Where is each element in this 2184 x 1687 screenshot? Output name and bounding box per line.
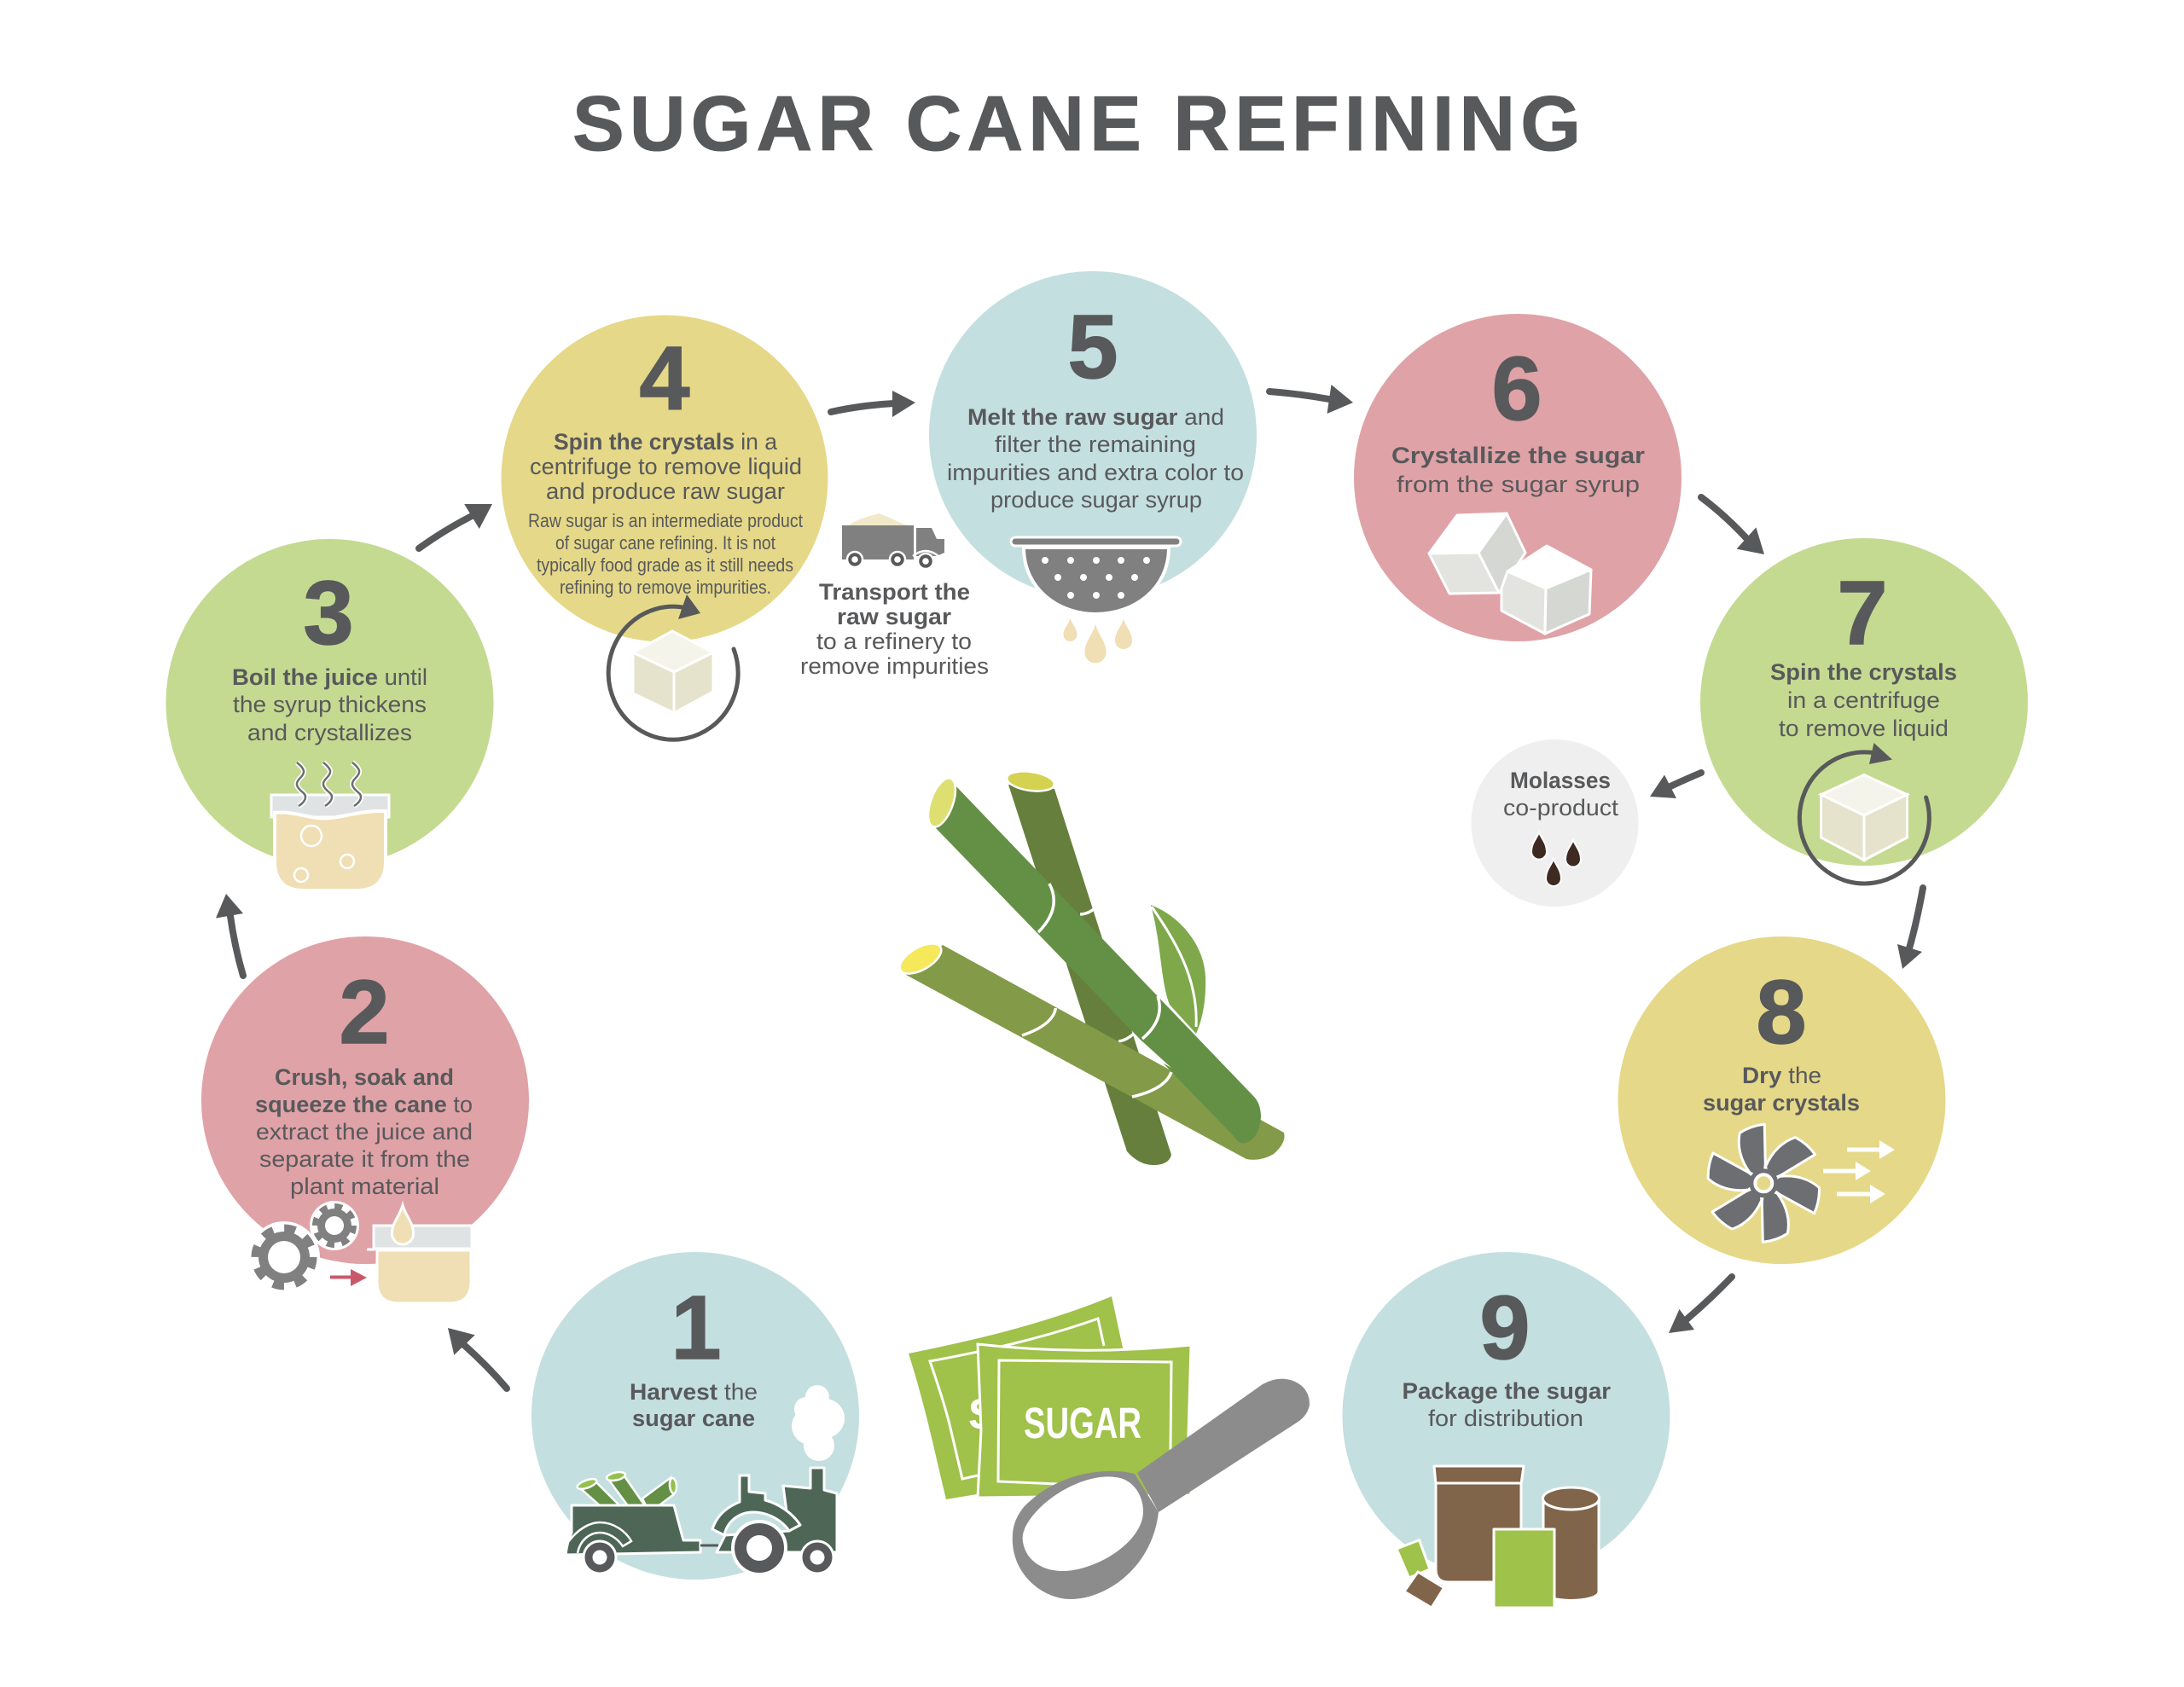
panel: step 7 spin: [1700, 538, 2028, 884]
front packet: [978, 1344, 1191, 1498]
text: step 1: [630, 1379, 758, 1431]
wagon fender arcs: [568, 1522, 631, 1553]
text: step 5: impurities and extra color to: [947, 460, 1244, 485]
icon: centrifuge cube: [1799, 743, 1929, 884]
icon: sugar cubes: [1429, 513, 1591, 634]
text: step 2: Crush, soak and: [275, 1064, 454, 1090]
icon: air arrows: [1823, 1140, 1895, 1203]
mid stalk: [923, 774, 1261, 1143]
number 8: 8: [1757, 962, 1806, 1063]
text: step 3: and crystallizes: [247, 720, 412, 745]
icon: boiling pot: [271, 762, 389, 890]
text: transport: Transport the: [819, 579, 970, 605]
text: step 4: [530, 429, 802, 504]
text: molasses: Molasses: [1510, 768, 1611, 793]
arrow: step 8 to 9: [1669, 1277, 1732, 1333]
back packet: [909, 1296, 1124, 1499]
icon: fan: [1700, 1124, 1827, 1242]
icon: centrifuge cube: [608, 594, 738, 739]
text: step 7: [1770, 659, 1957, 741]
spoon: [1013, 1379, 1310, 1599]
circle: step 2 background: [201, 936, 529, 1264]
arrow: step 2 to 3: [216, 894, 243, 976]
text: step 4: centrifuge to remove liquid: [530, 454, 802, 479]
number 9: 9: [1480, 1278, 1530, 1378]
wagon canes: [576, 1470, 677, 1507]
panel: step 9 package: [1343, 1252, 1670, 1608]
text: step 4: Spin the crystals in a: [554, 429, 778, 455]
icon: truck: [842, 513, 944, 569]
arrow: step 5 to 6: [1269, 385, 1353, 414]
circle: step 1 background: [531, 1252, 859, 1580]
number 6: 6: [1492, 339, 1542, 439]
text: step 5: produce sugar syrup: [990, 487, 1202, 513]
icon: small gear: [310, 1201, 359, 1250]
text: transport: to a refinery to: [816, 629, 972, 654]
text: transport: [800, 579, 989, 679]
panel: step 3 boil: [166, 539, 493, 890]
number 2: 2: [340, 962, 389, 1063]
dark stalk: [1006, 768, 1171, 1165]
circle: step 7 background: [1700, 538, 2028, 866]
arrow: step 6 to 7: [1701, 497, 1764, 554]
icon: tractor and wagon: [566, 1385, 845, 1574]
text: step 1: sugar cane: [632, 1406, 755, 1431]
text: raw sugar note: [528, 510, 803, 598]
circle: step 5 background: [929, 271, 1257, 599]
circle: step 6 background: [1354, 314, 1682, 641]
tractor front wheel: [801, 1541, 834, 1574]
number 7: 7: [1838, 563, 1887, 664]
text: transport: remove impurities: [800, 653, 989, 679]
light stalk: [895, 937, 1285, 1160]
text: raw sugar note: of sugar cane refining. It is not: [555, 532, 775, 554]
circle: step 9 background: [1343, 1252, 1670, 1580]
circle: step 8 background: [1618, 936, 1945, 1264]
tractor hood and fender: [712, 1475, 800, 1535]
text: step 4: and produce raw sugar: [546, 478, 785, 504]
panel: transport truck: [800, 513, 989, 679]
arrow: step 4 to 5: [831, 391, 915, 417]
arrow: step 7 to molasses: [1650, 773, 1701, 798]
text: step 7: to remove liquid: [1779, 716, 1949, 741]
text: molasses: [1503, 768, 1619, 820]
icon: molasses drops: [1531, 832, 1581, 886]
text: step 9: for distribution: [1428, 1406, 1583, 1431]
text: step 7: in a centrifuge: [1787, 687, 1940, 713]
text: step 3: the syrup thickens: [233, 692, 427, 717]
text: step 2: [255, 1064, 473, 1199]
text: step 5: filter the remaining: [995, 432, 1196, 457]
text: molasses: co-product: [1503, 795, 1619, 820]
illustration: sugar packets and spoon: [909, 1296, 1310, 1599]
back packet: S: [968, 1390, 996, 1438]
circle: step 4 background: [502, 316, 828, 641]
text: raw sugar note: typically food grade as it still needs: [537, 554, 793, 576]
text: step 5: Melt the raw sugar and: [967, 404, 1224, 430]
text: step 9: [1403, 1378, 1611, 1431]
text: step 2: plant material: [290, 1174, 439, 1199]
panel: step 4 spin: [502, 316, 828, 739]
text: step 2: separate it from the: [259, 1146, 470, 1172]
smoke cloud: [792, 1385, 845, 1461]
number 4: 4: [640, 328, 690, 429]
text: raw sugar note: refining to remove impurities.: [560, 577, 771, 598]
panel: step 8 dry: [1618, 936, 1945, 1264]
panel: step 2 crush: [201, 936, 529, 1303]
light stalk joint: [1132, 1072, 1171, 1097]
circle: molasses background: [1471, 739, 1638, 907]
icon: juice cup: [367, 1205, 472, 1303]
icon: strainer: [1011, 537, 1181, 663]
illustration: sugar cane stalks: [895, 768, 1285, 1165]
text: step 3: Boil the juice until: [232, 664, 427, 690]
icon: syrup drops: [1063, 618, 1132, 663]
panel: step 1 harvest: [531, 1252, 859, 1580]
text: step 8: [1703, 1063, 1860, 1116]
text: transport: raw sugar: [837, 604, 952, 629]
tractor rear wheel: [733, 1522, 786, 1574]
text: step 7: Spin the crystals: [1770, 659, 1957, 685]
text: step 2: extract the juice and: [256, 1119, 473, 1145]
number 3: 3: [304, 563, 353, 664]
text: step 6: from the sugar syrup: [1397, 472, 1640, 497]
text: step 5: [947, 404, 1244, 513]
wagon wheel: [584, 1541, 616, 1574]
text: step 9: Package the sugar: [1403, 1378, 1611, 1404]
text: step 8: sugar crystals: [1703, 1090, 1860, 1116]
leaf: [1151, 905, 1205, 1034]
text: step 2: squeeze the cane to: [255, 1092, 473, 1117]
text: step 6: [1391, 443, 1646, 497]
icon: packages: [1397, 1466, 1599, 1608]
panel: step 6 crystallize: [1354, 314, 1682, 641]
hitch: [700, 1544, 718, 1547]
arrow: step 1 to 2: [448, 1328, 507, 1388]
title: SUGAR CANE REFINING: [572, 81, 1581, 167]
wagon body: [566, 1505, 700, 1555]
number 5: 5: [1068, 297, 1118, 397]
arrow: step 3 to 4: [419, 504, 492, 548]
icon: big gear: [248, 1221, 320, 1293]
panel: step 5 melt: [929, 271, 1257, 663]
text: step 8: Dry the: [1742, 1063, 1821, 1088]
front packet: SUGAR: [1024, 1399, 1141, 1447]
icon: red arrow: [330, 1269, 367, 1286]
number 1: 1: [671, 1278, 721, 1378]
tractor rear body: [717, 1468, 837, 1552]
arrow: step 7 to 8: [1897, 888, 1923, 969]
text: step 3: [232, 664, 427, 745]
text: step 1: Harvest the: [630, 1379, 758, 1405]
circle: step 3 background: [166, 539, 493, 867]
text: raw sugar note: Raw sugar is an intermediate product: [528, 510, 803, 531]
text: step 6: Crystallize the sugar: [1391, 443, 1646, 468]
panel: molasses co-product: [1471, 739, 1638, 907]
